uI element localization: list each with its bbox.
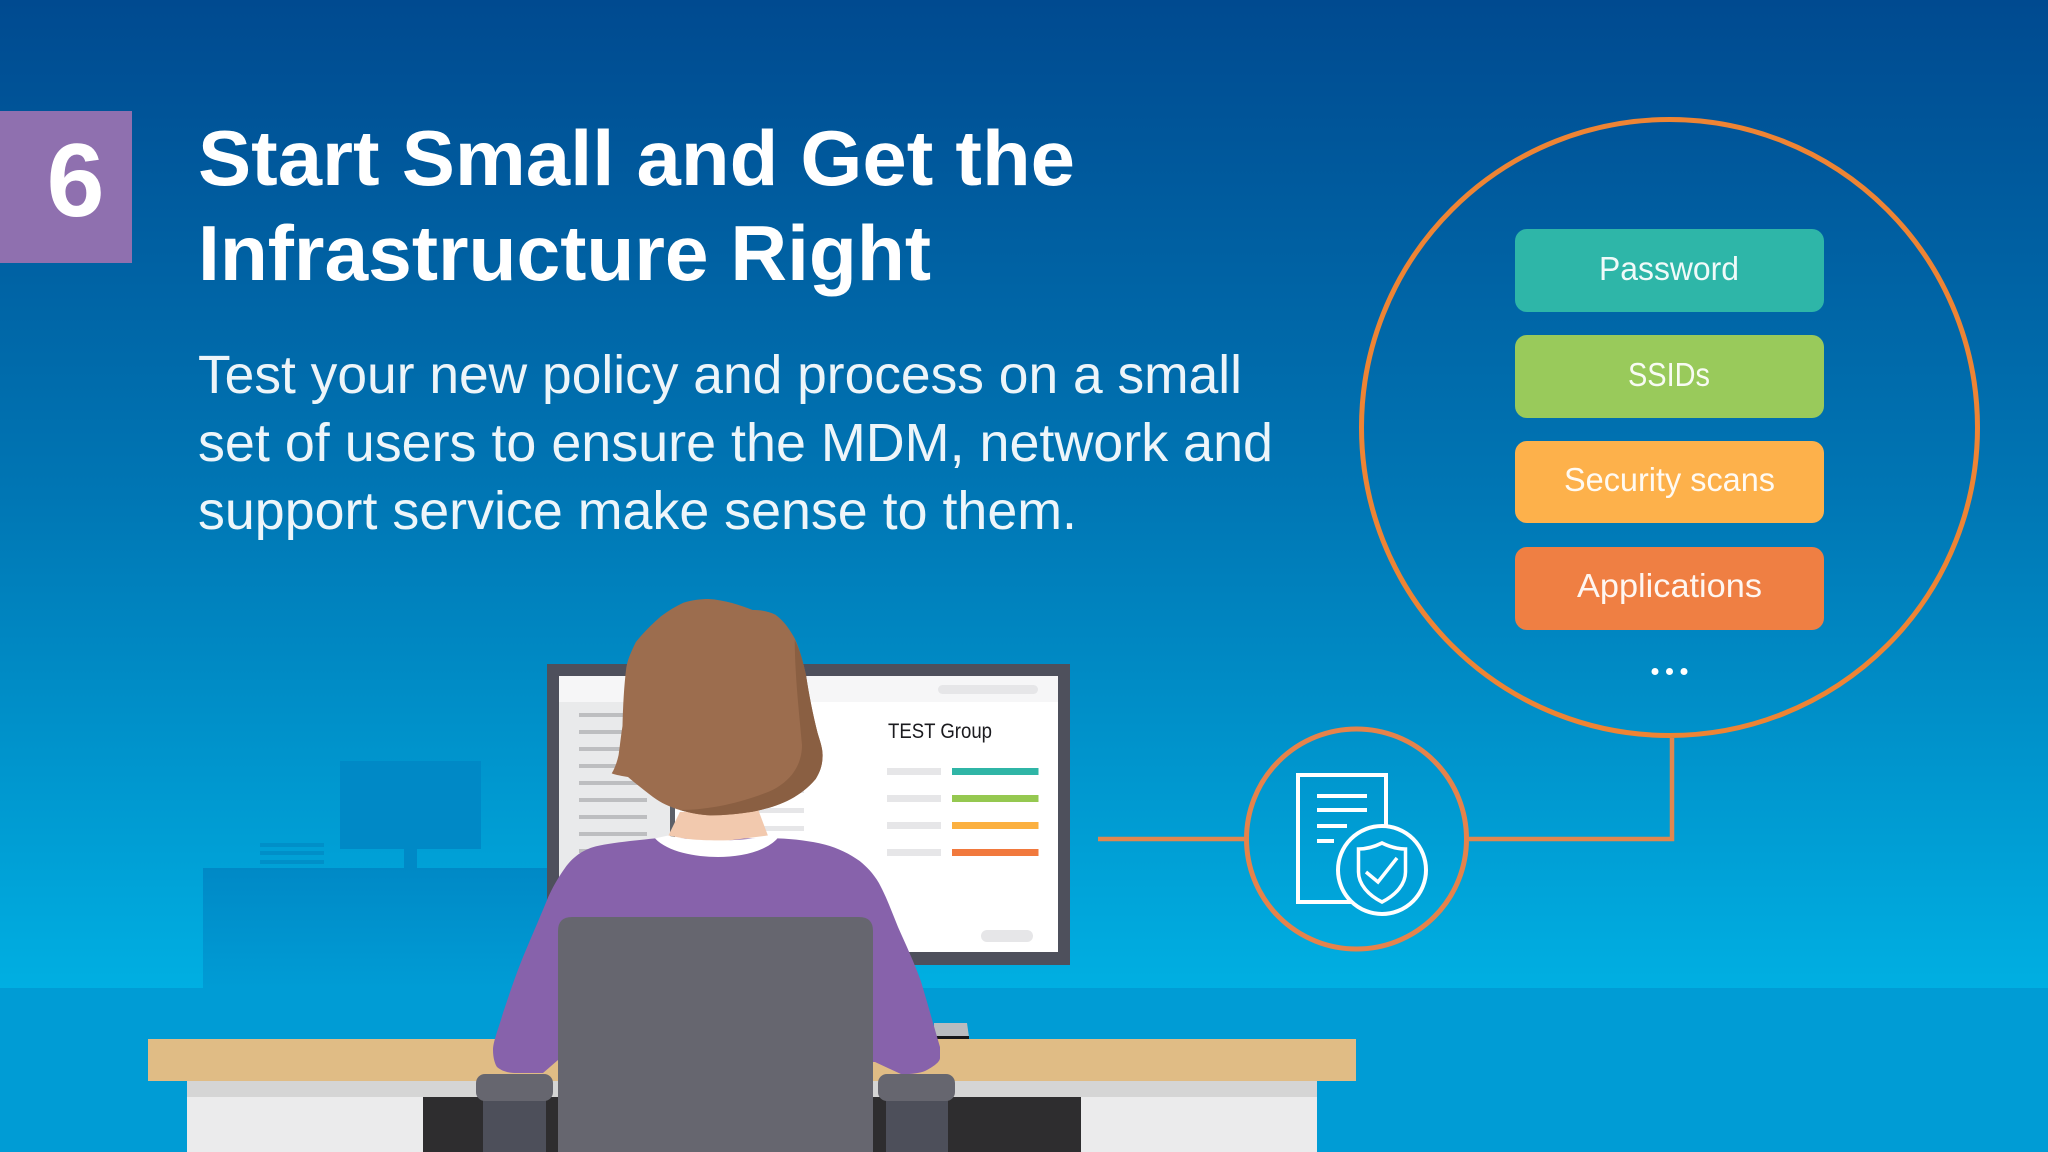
body text: set of users to ensure the MDM, network and: [198, 413, 1273, 473]
screen heading: TEST Group: [888, 720, 992, 743]
number badge: 6: [47, 123, 104, 239]
body text: [198, 345, 1273, 541]
connector lines: [1098, 738, 1672, 839]
number badge: [0, 111, 132, 263]
body text: Test your new policy and process on a small: [198, 345, 1242, 405]
hair: [612, 599, 823, 815]
title: [198, 114, 1075, 297]
icon: document with shield: [1298, 775, 1426, 914]
shirt: [493, 838, 940, 1074]
policy icon circle: [1246, 729, 1466, 949]
item: Security scans: Security scans: [1564, 461, 1775, 498]
screen rows: [887, 768, 1038, 856]
title: Infrastructure Right: [198, 209, 931, 297]
neck: [668, 810, 768, 843]
item: Applications: Applications: [1577, 567, 1762, 604]
item: Password: Password: [1599, 250, 1739, 287]
item: Password: [1515, 229, 1824, 312]
item: SSIDs: SSIDs: [1628, 356, 1710, 393]
background office silhouette: [203, 761, 563, 988]
monitor: [547, 664, 1070, 965]
ellipsis dots: [1652, 668, 1688, 675]
desk: [148, 1039, 1356, 1152]
body text: support service make sense to them.: [198, 481, 1077, 541]
person: [493, 599, 940, 1074]
collar: [655, 836, 778, 857]
title: Start Small and Get the: [198, 114, 1075, 202]
keyboard: [934, 1023, 969, 1039]
item: Applications: [1515, 547, 1824, 630]
item: Security scans: [1515, 441, 1824, 523]
chair: [476, 917, 955, 1152]
settings circle: [1362, 120, 1978, 736]
item: SSIDs: [1515, 335, 1824, 418]
